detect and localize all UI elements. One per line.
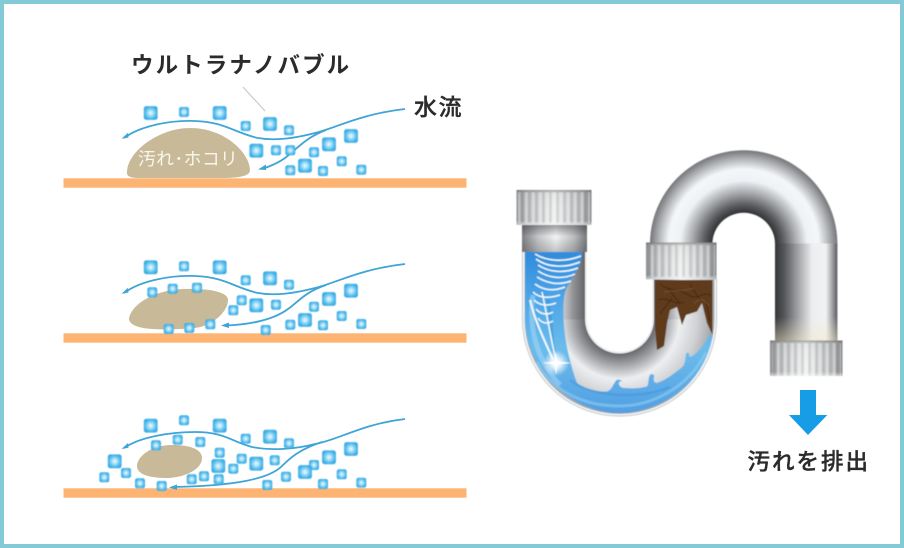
floor [64, 488, 466, 498]
sparkle [542, 350, 572, 376]
floor [64, 178, 466, 188]
bubbles [99, 415, 366, 491]
dirt blob [127, 128, 250, 178]
glass U trap metal interior [523, 250, 716, 415]
heading: ultra nano bubble: ウルトラナノバブル [131, 52, 351, 78]
panel: step 2 bubbles lift dirt [64, 260, 466, 343]
lower right collar [770, 340, 842, 376]
glass tube outline [522, 250, 716, 416]
leader line [243, 87, 265, 111]
panel: step 1 dirt with bubbles and water flow [64, 52, 466, 188]
dirt blob [129, 289, 228, 329]
floor [64, 333, 466, 343]
brown grime [655, 280, 712, 350]
label: dirt and dust: 汚れ･ホコリ [138, 149, 238, 169]
water flow arrows [122, 109, 405, 170]
bubbles [144, 260, 366, 335]
water flow arrows [122, 419, 405, 490]
label: water flow: 水流 [414, 94, 463, 120]
water flow arrows [122, 264, 405, 328]
bubbles [144, 106, 366, 176]
panel: step 3 dirt surrounded and lifted off [64, 415, 466, 498]
water stream [525, 252, 713, 413]
dirt blob [137, 445, 202, 478]
arrow: down [789, 390, 827, 435]
upper metal arch [650, 150, 837, 342]
label: discharge dirt: 汚れを排出 [748, 450, 870, 474]
illustration: drain trap pipe [516, 150, 842, 416]
middle collar [646, 242, 716, 280]
water swirl highlights [530, 254, 581, 360]
left neck [522, 224, 587, 252]
left collar [516, 190, 592, 225]
